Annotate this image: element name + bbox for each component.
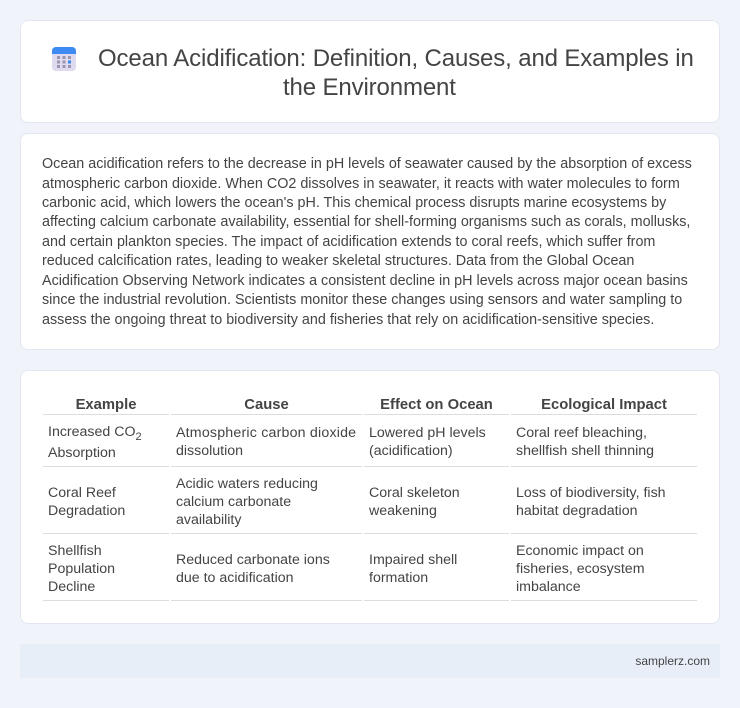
- row: shellfish: Impaired shell: [369, 552, 457, 568]
- row: shellfish: Reduced carbonate ions: [176, 552, 330, 568]
- table header: Ecological Impact: [541, 397, 667, 413]
- row: shellfish: imbalance: [516, 579, 581, 595]
- row: increased CO2: dissolution: [176, 443, 243, 459]
- row: coral reef: habitat degradation: [516, 503, 637, 519]
- row: shellfish: due to acidification: [176, 570, 294, 586]
- row: shellfish: fisheries, ecosystem: [516, 561, 645, 577]
- row: coral reef: Acidic waters reducing: [176, 476, 318, 492]
- title: Ocean Acidification: Definition, Causes, and Examples in: [98, 45, 694, 72]
- title: the Environment: [283, 74, 456, 101]
- row: coral reef: Degradation: [48, 503, 125, 519]
- row: coral reef: calcium carbonate: [176, 494, 291, 510]
- title: [98, 45, 694, 101]
- row: increased CO2: Atmospheric carbon dioxide: [176, 425, 356, 441]
- description text: affecting calcium carbonate availability, essential for shell-forming organisms such as corals, mollusks,: [42, 214, 690, 230]
- row: shellfish: Decline: [48, 579, 95, 595]
- row: shellfish: Shellfish: [48, 543, 102, 559]
- row: shellfish: Population: [48, 561, 115, 577]
- description text: assess the ongoing threat to biodiversity and fisheries that rely on acidification-sensitive species.: [42, 312, 654, 328]
- description text: since the industrial revolution. Scientists monitor these changes using sensors and water sampling to: [42, 292, 682, 308]
- row: coral reef: weakening: [369, 503, 437, 519]
- row: increased CO2: [43, 424, 697, 467]
- description text: reduced calcification rates, leading to weaker skeletal structures. Data from the Global Ocean: [42, 253, 634, 269]
- row: coral reef: Coral Reef: [48, 485, 116, 501]
- table header: [43, 397, 697, 415]
- description text: and certain plankton species. The impact of acidification extends to coral reefs, which suffer from: [42, 234, 655, 250]
- row: coral reef: [43, 476, 697, 534]
- row: shellfish: formation: [369, 570, 428, 586]
- description text: [42, 156, 692, 328]
- row: shellfish: [43, 543, 697, 601]
- description text: atmospheric carbon dioxide. When CO2 dissolves in seawater, it reacts with water molecules to form: [42, 176, 680, 192]
- table header: Cause: [244, 397, 289, 413]
- row: increased CO2: Coral reef bleaching,: [516, 425, 647, 441]
- footer text: samplerz.com: [635, 654, 710, 668]
- row: coral reef: Loss of biodiversity, fish: [516, 485, 666, 501]
- table header: Example: [76, 397, 136, 413]
- table panel: [20, 370, 720, 624]
- title card: [20, 20, 720, 123]
- row: shellfish: Economic impact on: [516, 543, 644, 559]
- row: increased CO2: shellfish shell thinning: [516, 443, 654, 459]
- table header: Effect on Ocean: [380, 397, 493, 413]
- row: increased CO2: Absorption: [48, 445, 116, 461]
- table: [43, 397, 697, 601]
- row: coral reef: Coral skeleton: [369, 485, 460, 501]
- row: coral reef: availability: [176, 512, 241, 528]
- footer bar: [20, 644, 720, 678]
- row: increased CO2: Lowered pH levels: [369, 425, 486, 441]
- description panel: [20, 133, 720, 350]
- description text: carbonic acid, which lowers the ocean's pH. This chemical process disrupts marine ecosystems by: [42, 195, 666, 211]
- row: increased CO2: (acidification): [369, 443, 453, 459]
- row: increased CO2: Increased CO2: [48, 424, 142, 443]
- description text: Acidification Observing Network indicates a consistent decline in pH levels across major ocean basins: [42, 273, 688, 289]
- description text: Ocean acidification refers to the decrease in pH levels of seawater caused by the absorption of excess: [42, 156, 692, 172]
- icon: calendar grid: [52, 47, 76, 71]
